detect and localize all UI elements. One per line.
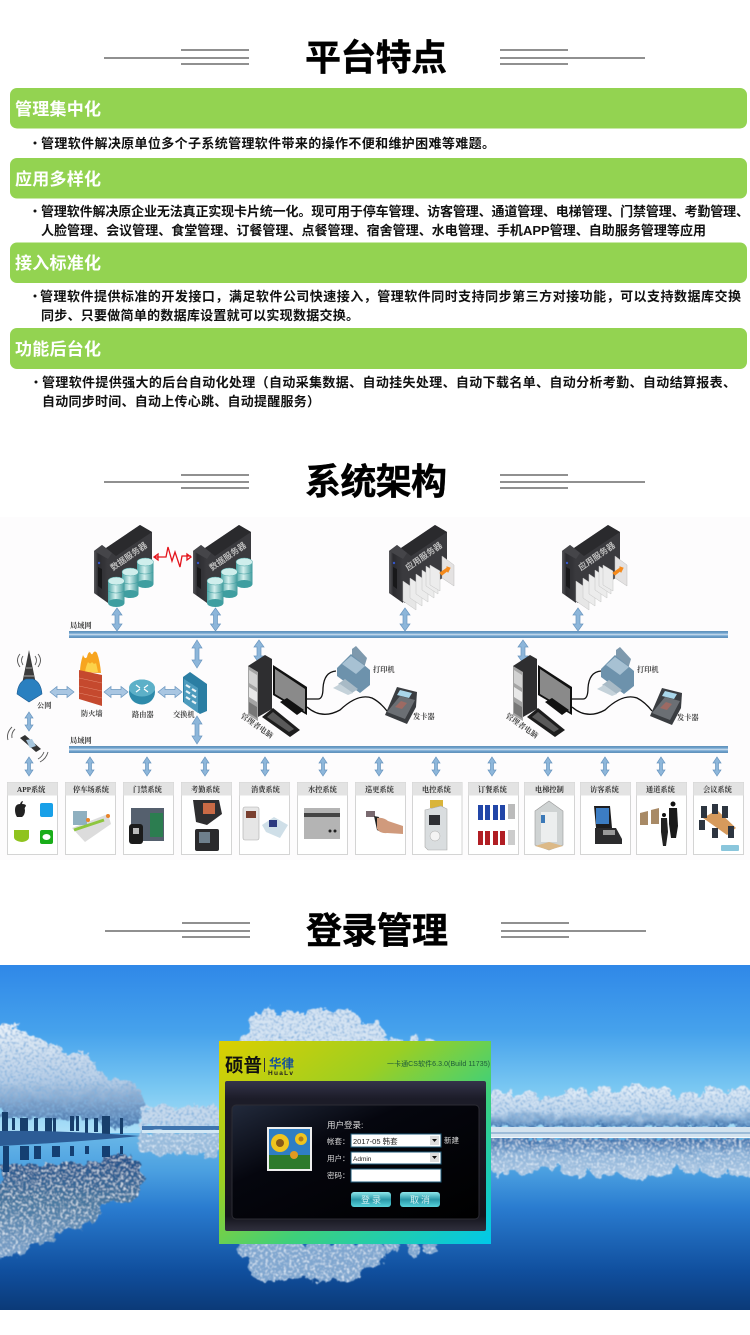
login button: 登录 [361,1195,381,1205]
logo: HuaLv [268,1070,293,1077]
arrow: tower to satellite [25,712,33,731]
inner login form: 用户登录: [327,1120,363,1130]
printer left: 打印机 [373,665,395,674]
inner login form [232,1105,479,1219]
system box: 考勤 [182,782,232,854]
printer left [333,646,395,695]
system box: 巡更: 巡更系统 [365,785,395,794]
panel: 应用多样化: 人脸管理、会议管理、食堂管理、订餐管理、点餐管理、宿舍管理、水电管理、手机APP管理、自助服务管理等应用 [41,223,706,238]
account field: 2017-05 韩套 [353,1136,398,1146]
system box: 订餐: 订餐系统 [478,785,508,794]
lower LAN bar: 局域网 [70,736,92,745]
heading: 平台特点 [104,37,645,78]
arrow: switch to lower LAN [192,716,202,744]
system box: 访客 [580,782,630,854]
lower LAN arrows [86,757,721,776]
icon: router: 路由器 [132,710,154,719]
icon: signal tower [17,650,51,710]
manager computer right: 管理者电脑 [504,710,541,740]
system box: 电控: 电控系统 [422,785,452,794]
database server 1 [94,525,154,607]
icon: switch [173,672,207,719]
system box: 停车场 [66,782,116,854]
icon: signal tower: 公网 [37,701,51,710]
system box: 巡更 [356,782,406,854]
card issuer right: 发卡器 [677,713,699,722]
right tree band [480,1085,750,1127]
heading: 平台特点: 平台特点 [305,37,447,78]
panel: 接入标准化 [10,242,747,323]
icon: firewall: 防火墙 [81,709,103,718]
panel: 管理集中化 [10,88,747,151]
panel: 接入标准化: 管理软件提供标准的开发接口，满足软件公司快速接入，管理软件同时支持同步第三方对接功能，可以支持数据库交换 [40,289,741,304]
system box: 通道: 通道系统 [646,785,676,794]
arrow: tower to firewall [50,686,74,698]
system box: APP: APP系统 [17,785,46,794]
logo [225,1055,294,1077]
snow bank [491,1127,750,1138]
system box: 会议: 会议系统 [703,785,733,794]
panel: 应用多样化: 管理软件解决原企业无法真正实现卡片统一化。现可用于停车管理、访客管理、通道管理、电梯管理、门禁管理、考勤管理、 [41,204,749,219]
lower LAN bar [69,736,728,753]
avatar photo [267,1127,312,1171]
application server 1 [389,525,454,610]
inner login form: 用户： [327,1153,350,1163]
left trees [0,1025,143,1128]
manager computer left [239,655,387,740]
database server 2 [193,525,252,607]
arrow: router to switch [158,686,182,698]
card issuer right [650,688,699,725]
cancel button [400,1192,440,1207]
system box: 电梯 [524,782,574,854]
logo: 华律 [269,1056,294,1071]
printer right [597,647,659,696]
system box: 通道 [636,782,686,854]
center trees reflection [239,1234,436,1283]
heading: 登录管理 [105,910,646,951]
panel: 应用多样化: 应用多样化 [15,169,101,189]
password field [351,1169,441,1182]
inner login form: 帐套： [327,1136,350,1146]
card issuer left [385,687,435,724]
login button [351,1192,391,1207]
system box: 消费 [240,782,290,854]
lake bank [0,1131,140,1146]
database server 1: 数据服务器 [108,540,149,573]
panel: 管理集中化: 管理集中化 [15,99,101,119]
inner login form: 新建 [444,1135,459,1145]
database server 2: 数据服务器 [207,540,248,573]
system box: 电梯: 电梯控制 [535,785,564,794]
user field: Admin [353,1156,372,1163]
panel: 接入标准化: 同步、只要做简单的数据库设置就可以实现数据交换。 [41,308,359,323]
login window [219,1041,491,1244]
version text: 一卡通CS软件6.3.0(Build 11735) [387,1059,490,1068]
system box: APP [8,782,58,854]
panel: 接入标准化: 接入标准化 [15,253,101,273]
panel: 功能后台化: 功能后台化 [15,339,101,359]
system box: 水控: 水控系统 [308,785,338,794]
panel: 功能后台化 [10,328,747,409]
system box: 消费: 消费系统 [251,785,281,794]
far small trees [138,1103,220,1128]
application server 2: 应用服务器 [576,540,617,573]
card issuer left: 发卡器 [413,712,435,721]
panel: 管理集中化: 管理软件解决原单位多个子系统管理软件带来的操作不便和维护困难等难题。 [41,136,495,151]
inner login form: 密码： [327,1170,350,1180]
system box: 门禁 [124,782,174,854]
right tree band reflection [480,1138,750,1180]
system box: 订餐 [468,782,518,854]
left trunks [2,1112,123,1138]
panel: 功能后台化: 自动同步时间、自动上传心跳、自动提醒服务） [42,394,320,409]
application server 1: 应用服务器 [403,540,444,573]
left trunks reflection [3,1146,123,1172]
printer right: 打印机 [637,665,659,674]
upper LAN bar [69,621,728,638]
heading: 系统架构 [104,461,645,502]
system box: 访客: 访客系统 [590,785,620,794]
icon: firewall [79,652,103,718]
left trees reflection [0,1154,143,1257]
system box: 电控 [412,782,462,854]
system box: 水控 [298,782,348,854]
logo: 硕普 [225,1055,262,1076]
red heartbeat link [154,547,191,567]
panel: 应用多样化 [10,158,749,238]
user field [351,1152,441,1164]
dark panel [225,1081,486,1231]
photo: snowy lake scenery [0,965,750,1310]
account field [351,1134,441,1147]
heading: 登录管理: 登录管理 [306,910,448,951]
system box: 停车场: 停车场系统 [73,785,110,794]
system box: 考勤: 考勤系统 [191,785,221,794]
diagram: system architecture [0,517,750,860]
manager computer right [504,655,652,740]
manager computer left: 管理者电脑 [239,710,276,740]
upper LAN bar: 局域网 [70,621,92,630]
far trees reflection [138,1132,220,1157]
arrow: firewall to router [104,686,128,698]
cancel button: 取消 [410,1194,430,1205]
system box: 会议 [694,782,744,854]
center trees behind window [239,1008,436,1057]
icon: satellite [8,727,48,762]
icon: router [129,680,155,719]
application server 2 [562,525,627,610]
icon: switch: 交换机 [173,710,195,719]
panel: 功能后台化: 管理软件提供强大的后台自动化处理（自动采集数据、自动挂失处理、自动下载名单、自动分析考勤、自动结算报表、 [42,375,736,390]
system box: 门禁: 门禁系统 [133,785,163,794]
heading: 系统架构: 系统架构 [305,461,447,502]
upper LAN arrows [112,608,583,668]
arrow: satellite to app [25,757,33,776]
